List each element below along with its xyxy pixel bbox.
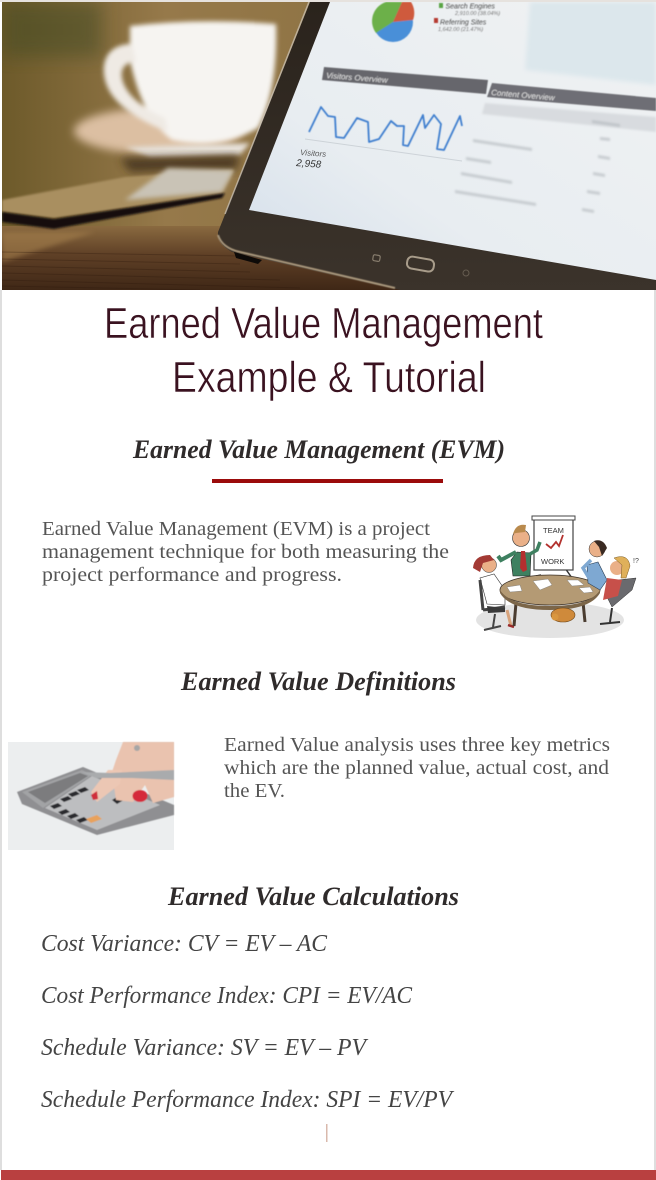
heading: Earned Value Management (EVM): Earned Value Management (EVM)	[132, 435, 505, 464]
small vertical tick	[326, 1124, 328, 1142]
text block: EVM description: management technique for both measuring the	[42, 542, 449, 563]
formula list: Cost Performance Index: CPI = EV/AC	[41, 983, 413, 1009]
visitors overview header	[322, 67, 488, 94]
visitors stat: Visitors	[300, 148, 327, 159]
visitors overview header: Visitors Overview	[326, 71, 389, 85]
woman right in chair: !?	[633, 558, 639, 565]
man right	[583, 540, 607, 590]
title	[104, 299, 543, 402]
illustration: team meeting around a table	[473, 516, 639, 638]
cat	[551, 608, 575, 622]
presenter	[498, 525, 540, 576]
saucer	[74, 108, 242, 154]
blurred table rows	[455, 120, 620, 213]
text block: key metrics: Earned Value analysis uses three key metrics	[224, 735, 610, 756]
formula list: Cost Variance: CV = EV – AC	[41, 931, 328, 957]
text block: EVM description	[42, 519, 449, 586]
text block: key metrics: the EV.	[224, 781, 285, 802]
pie legend: 2,910.00 (38.04%)	[454, 11, 500, 17]
pie legend: Referring Sites	[440, 20, 487, 26]
woman right in chair	[600, 557, 639, 624]
visitors stat: 2,958	[295, 158, 322, 171]
formula list: Schedule Performance Index: SPI = EV/PV	[41, 1087, 454, 1113]
pie legend	[434, 3, 500, 33]
pie legend: Search Engines	[446, 4, 495, 10]
text block: key metrics: which are the planned value, actual cost, and	[224, 758, 609, 779]
table	[500, 575, 600, 626]
visitors stat	[296, 150, 326, 168]
photo: hand using a calculator	[8, 742, 174, 850]
coffee cup	[104, 21, 276, 143]
heading: Earned Value Calculations: Earned Value Calculations	[167, 882, 459, 911]
formula list	[41, 931, 454, 1113]
content overview header: Content Overview	[491, 88, 556, 103]
hero photo: tablet with analytics dashboard beside a coffee cup	[2, 2, 656, 290]
content overview header	[487, 83, 656, 111]
phone on table	[2, 168, 234, 229]
heading: Earned Value Definitions: Earned Value Definitions	[180, 667, 456, 696]
formula list: Schedule Variance: SV = EV – PV	[41, 1035, 368, 1061]
line chart	[309, 107, 462, 150]
flip chart: WORK	[541, 557, 564, 566]
title: Example & Tutorial	[172, 353, 486, 402]
tablet home button	[373, 255, 469, 276]
text block: EVM description: project performance and progress.	[42, 565, 342, 586]
footer bar	[1, 1170, 656, 1180]
tablet body	[218, 2, 656, 290]
heading underline	[212, 479, 443, 483]
text block: EVM description: Earned Value Management (EVM) is a project	[42, 519, 431, 540]
flip chart: TEAM	[543, 526, 564, 535]
text block: key metrics	[224, 735, 610, 802]
tablet screen	[249, 2, 656, 280]
pie chart on screen	[372, 2, 414, 42]
flip chart	[532, 516, 575, 578]
pie legend: 1,642.00 (21.47%)	[438, 27, 483, 33]
title: Earned Value Management	[104, 299, 543, 348]
woman left	[473, 555, 514, 630]
